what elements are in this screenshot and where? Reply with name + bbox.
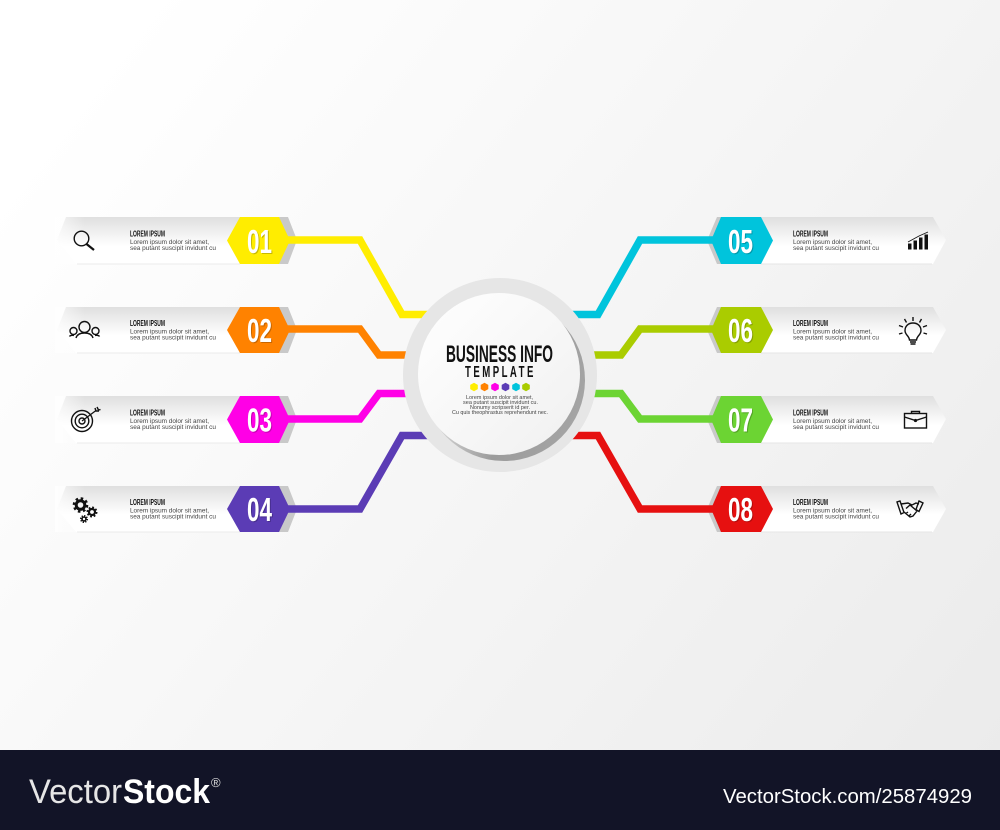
icon: team: [70, 322, 100, 338]
panel: item 07: LOREM IPSUM: [793, 408, 828, 418]
panel: item 03: Lorem ipsum dolor sit amet,: [130, 418, 209, 425]
footer logo: Stock: [123, 773, 211, 811]
panel: item 05: [707, 217, 946, 264]
panel: item 02: LOREM IPSUM: [130, 319, 165, 328]
icon: target: [72, 407, 100, 432]
panel: item 01: [55, 217, 297, 264]
panel: item 08: Lorem ipsum dolor sit amet,: [793, 508, 872, 514]
panel: item 05: 05: [728, 223, 753, 260]
panel: item 08: 08: [728, 491, 753, 528]
panel: item 01: LOREM IPSUM: [130, 230, 165, 238]
icon: magnifier: [74, 231, 94, 250]
panel: item 06: 06: [728, 312, 753, 349]
panel: item 04: 04: [247, 491, 272, 528]
icon: growth chart: [908, 232, 928, 250]
panel: item 07: Lorem ipsum dolor sit amet,: [793, 418, 872, 425]
panel: item 03: LOREM IPSUM: [130, 408, 165, 418]
center text: Nonumy scripserit id per.: [470, 405, 530, 411]
center text: sea putant suscipit invidunt cu.: [463, 400, 538, 406]
panel: item 05: sea putant suscipit invidunt cu: [793, 245, 880, 252]
panel: item 06: LOREM IPSUM: [793, 319, 828, 328]
subtitle: TEMPLATE: [465, 363, 536, 381]
connector lines: [286, 240, 714, 509]
panel: item 02: sea putant suscipit invidunt cu: [130, 334, 217, 342]
title: BUSINESS INFO: [446, 341, 553, 368]
footer id: VectorStock.com/25874929: [723, 785, 972, 808]
panel: item 08: LOREM IPSUM: [793, 498, 828, 507]
footer logo: Vector: [29, 773, 122, 811]
center text: Lorem ipsum dolor sit amet,: [466, 395, 533, 401]
panel: item 06: [707, 307, 946, 353]
panel: item 04: LOREM IPSUM: [130, 498, 165, 507]
panel: item 02: 02: [247, 312, 272, 349]
panel: item 05: Lorem ipsum dolor sit amet,: [793, 239, 872, 246]
panel: item 04: sea putant suscipit invidunt cu: [130, 514, 217, 520]
panel: item 06: Lorem ipsum dolor sit amet,: [793, 328, 872, 336]
footer logo: ®: [211, 775, 221, 790]
panel: item 04: [55, 486, 297, 532]
panel: item 02: [55, 307, 297, 353]
panel: item 01: 01: [247, 223, 272, 260]
panel: item 07: [707, 396, 946, 443]
icon: briefcase: [904, 412, 926, 428]
panel: item 06: sea putant suscipit invidunt cu: [793, 334, 880, 342]
panel: item 03: [55, 396, 297, 443]
icon: light bulb: [899, 317, 927, 344]
center text: Cu quis theophrastus reprehendunt nec.: [452, 410, 548, 416]
panel: item 05: LOREM IPSUM: [793, 230, 828, 238]
icon: handshake: [897, 501, 923, 517]
center text: [452, 395, 548, 416]
panel: item 01: Lorem ipsum dolor sit amet,: [130, 239, 209, 246]
panel: item 04: Lorem ipsum dolor sit amet,: [130, 508, 209, 514]
panel: item 07: sea putant suscipit invidunt cu: [793, 424, 880, 431]
panel: item 02: Lorem ipsum dolor sit amet,: [130, 328, 209, 336]
panel: item 08: sea putant suscipit invidunt cu: [793, 514, 880, 520]
panel: item 01: sea putant suscipit invidunt cu: [130, 245, 217, 252]
panel: item 07: 07: [728, 402, 753, 438]
panel: item 03: sea putant suscipit invidunt cu: [130, 424, 217, 431]
center circle: [403, 278, 597, 472]
icon: gears: [74, 498, 96, 522]
footer bar: [0, 750, 1000, 830]
panel: item 08: [707, 486, 946, 532]
footer logo: [29, 773, 221, 811]
colour dots: [470, 383, 530, 391]
panel: item 03: 03: [247, 402, 272, 438]
